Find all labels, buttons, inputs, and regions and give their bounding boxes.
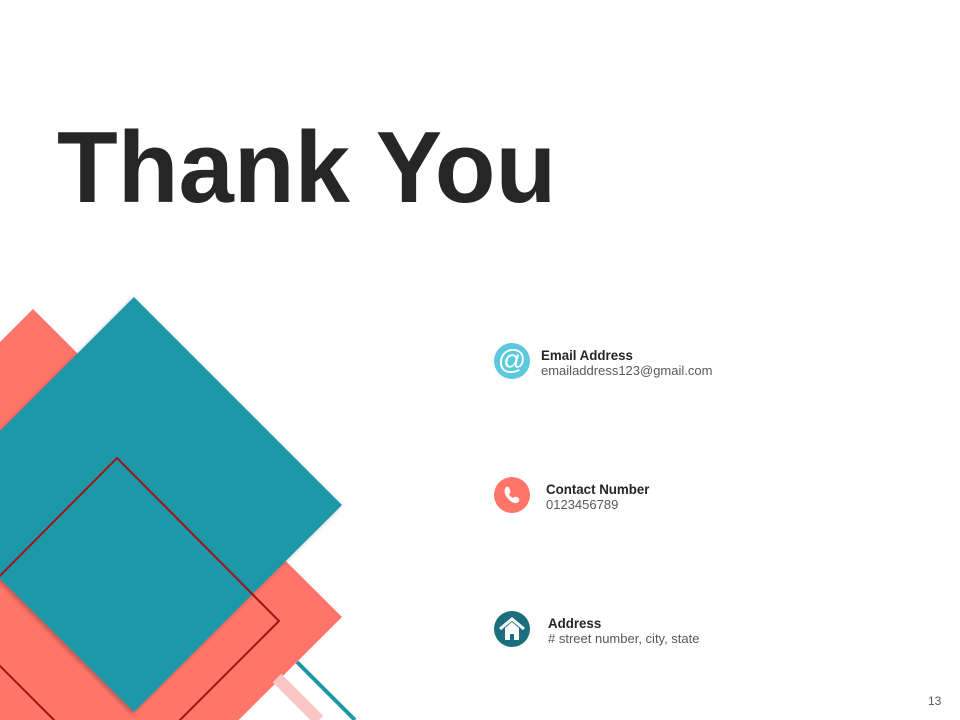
address text: Address xyxy=(548,615,601,631)
title: Thank You xyxy=(57,112,556,224)
contact: email xyxy=(494,343,712,379)
contact: phone xyxy=(494,477,650,513)
decorative shapes xyxy=(0,297,356,720)
phone text: Contact Number xyxy=(546,481,649,497)
contact: address xyxy=(494,611,700,647)
address text: # street number, city, state xyxy=(548,631,700,646)
phone text: 0123456789 xyxy=(546,497,618,512)
icon: house xyxy=(494,611,530,647)
icon: at sign: @ xyxy=(498,344,526,375)
pink line xyxy=(277,678,319,720)
email text: emailaddress123@gmail.com xyxy=(541,363,712,378)
phone text xyxy=(546,481,650,512)
teal line xyxy=(297,662,355,720)
teal diamond xyxy=(0,297,342,712)
page number: 13 xyxy=(928,694,941,708)
address text xyxy=(548,615,700,646)
outline diamond xyxy=(0,458,279,720)
email text: Email Address xyxy=(541,347,633,363)
coral diamond xyxy=(0,309,342,720)
icon: phone xyxy=(494,477,530,513)
icon: at sign xyxy=(494,343,530,379)
email text xyxy=(541,347,712,378)
